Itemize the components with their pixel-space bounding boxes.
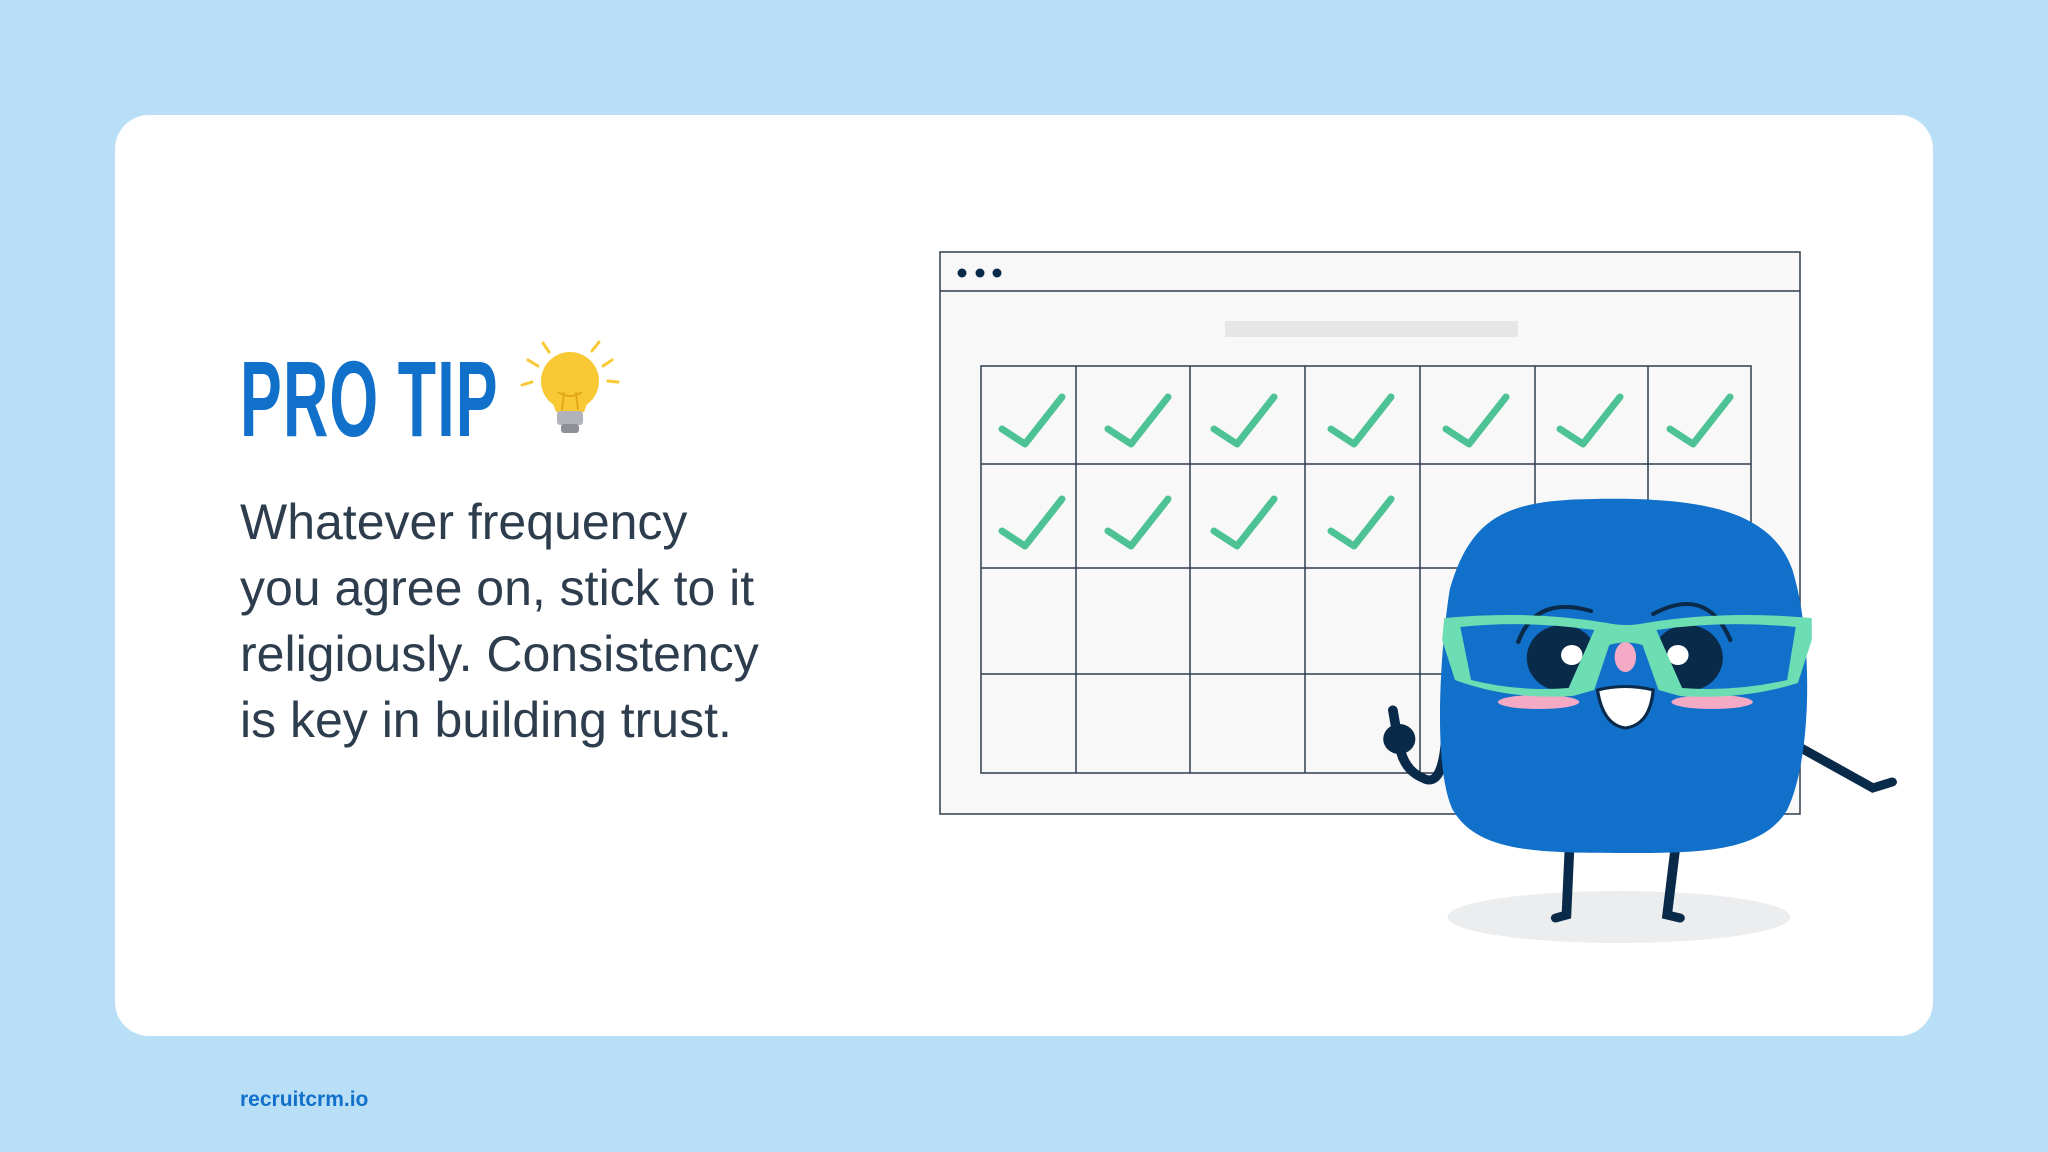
body text: is key in building trust. [240, 692, 732, 748]
icon: light bulb [522, 342, 618, 433]
calendar grid [981, 366, 1751, 773]
body text [240, 494, 759, 748]
body text: Whatever frequency [240, 494, 687, 550]
card panel [115, 115, 1933, 1036]
title: PRO TIP: PRO TIP [240, 338, 499, 459]
calendar window [940, 252, 1800, 814]
character mascot [1383, 499, 1892, 943]
body text: you agree on, stick to it [240, 560, 754, 616]
footer brand: recruitcrm.io [240, 1088, 368, 1111]
checkmarks [1002, 397, 1730, 546]
body text: religiously. Consistency [240, 626, 759, 682]
